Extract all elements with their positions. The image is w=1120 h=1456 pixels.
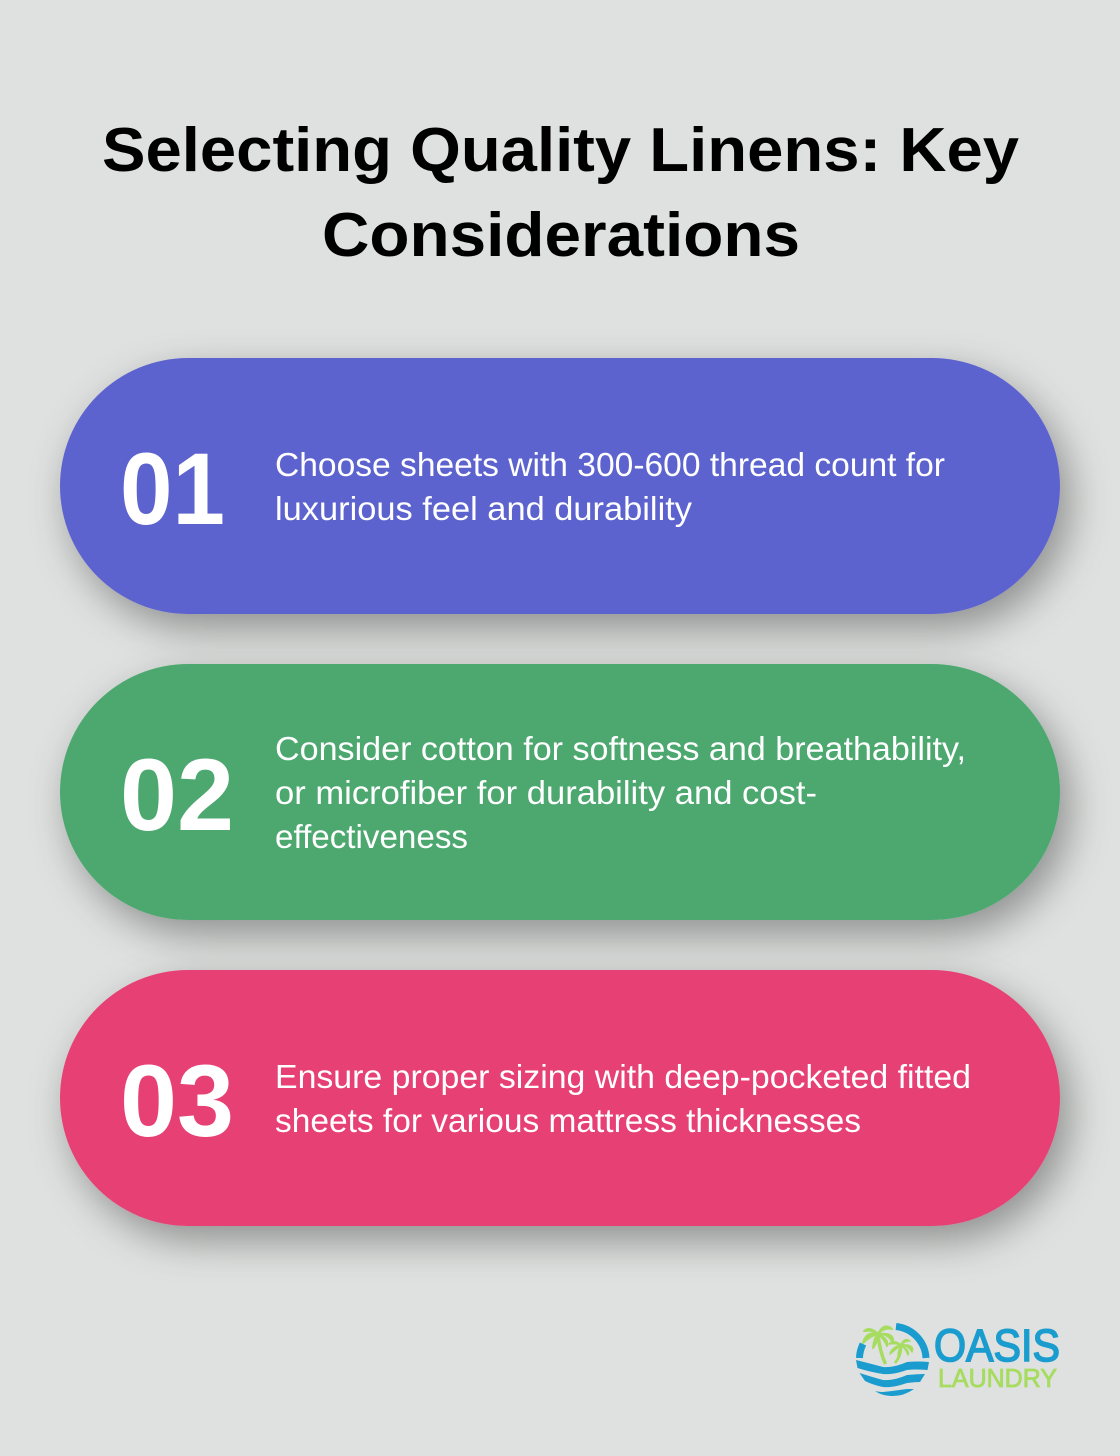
text block 03: Ensure proper sizing with deep-pocketed fitted (275, 1058, 971, 1095)
title: Considerations (322, 201, 800, 270)
logo: Oasis Laundry (856, 1320, 1060, 1396)
palm fronds large (863, 1326, 893, 1348)
text block 02: Consider cotton for softness and breathability, (275, 730, 966, 767)
icon: ring, waves and palm trees (856, 1326, 929, 1396)
palm fronds small (889, 1340, 913, 1356)
pill background 01 (60, 358, 1060, 614)
text block 02: or microfiber for durability and cost- (275, 774, 817, 811)
number 03: 03 (120, 1044, 234, 1158)
wordmark OASIS: OASIS (934, 1320, 1060, 1371)
panel: step 03 sizing (60, 970, 1060, 1226)
text block 02: effectiveness (275, 818, 468, 855)
text block 01: luxurious feel and durability (275, 490, 693, 527)
number 02: 02 (120, 738, 234, 852)
title (102, 116, 1020, 270)
wordmark LAUNDRY: LAUNDRY (938, 1363, 1057, 1393)
number 01: 01 (120, 432, 225, 546)
text block 01 (275, 446, 945, 527)
title: Selecting Quality Linens: Key (102, 116, 1020, 185)
pill background 03 (60, 970, 1060, 1226)
text block 01: Choose sheets with 300-600 thread count for (275, 446, 945, 483)
text block 03: sheets for various mattress thicknesses (275, 1102, 861, 1139)
panel: step 02 material (60, 664, 1060, 920)
text block 02 (275, 730, 966, 855)
pill background 02 (60, 664, 1060, 920)
text block 03 (275, 1058, 971, 1139)
panel: step 01 thread count (60, 358, 1060, 614)
